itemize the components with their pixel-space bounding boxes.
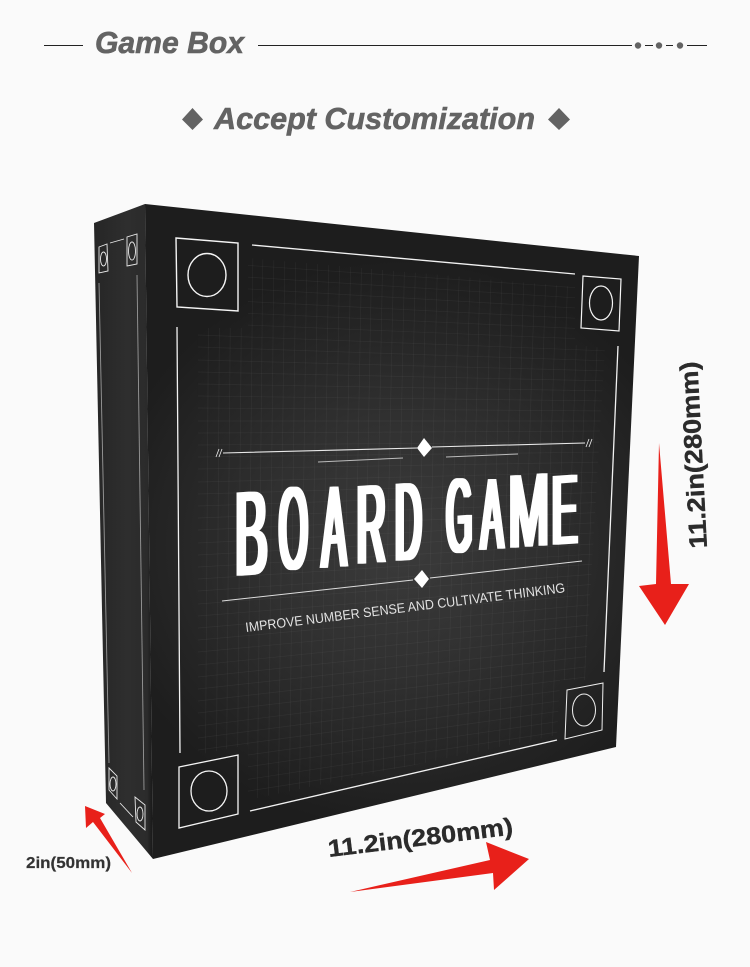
title: BOARD GAME: B bbox=[235, 464, 268, 602]
corner icon: top left bbox=[176, 238, 238, 311]
title: BOARD GAME: M bbox=[509, 451, 549, 571]
section header: Game Box: Game Box bbox=[95, 25, 246, 60]
game box bbox=[94, 204, 639, 859]
height dimension: arrow and label bbox=[639, 361, 713, 625]
faint grid on box front bbox=[198, 258, 604, 798]
box front face bbox=[145, 204, 639, 859]
title: BOARD GAME: R bbox=[357, 459, 386, 588]
title: BOARD GAME: D bbox=[395, 457, 422, 585]
tagline: IMPROVE NUMBER SENSE AND CULTIVATE THINKING bbox=[245, 580, 566, 635]
section header: Game Box bbox=[44, 25, 707, 60]
corner icon: top right bbox=[581, 276, 621, 331]
title: BOARD GAME: G bbox=[446, 455, 472, 576]
title ornament lines and diamond bbox=[216, 438, 592, 462]
corner icon: bottom left bbox=[179, 755, 238, 828]
width dimension: arrow and label: 11.2in(280mm) bbox=[326, 813, 514, 863]
height dimension: arrow and label: 11.2in(280mm) bbox=[675, 361, 713, 549]
title: BOARD GAME: A bbox=[322, 462, 346, 594]
title: BOARD GAME: O bbox=[279, 461, 308, 596]
corner icon: bottom right bbox=[565, 683, 603, 739]
lower ornament line and diamond bbox=[222, 561, 582, 601]
title: BOARD GAME: E bbox=[552, 455, 577, 567]
subheading: Accept Customization: Accept Customization bbox=[213, 101, 535, 136]
width dimension: arrow and label bbox=[326, 813, 529, 892]
title: BOARD GAME bbox=[235, 451, 577, 602]
title: BOARD GAME: A bbox=[481, 457, 503, 573]
front border frame lines bbox=[177, 245, 618, 811]
depth dimension: arrow and label bbox=[26, 806, 132, 873]
depth dimension: arrow and label: 2in(50mm) bbox=[26, 855, 111, 872]
box side panel bbox=[94, 204, 153, 859]
